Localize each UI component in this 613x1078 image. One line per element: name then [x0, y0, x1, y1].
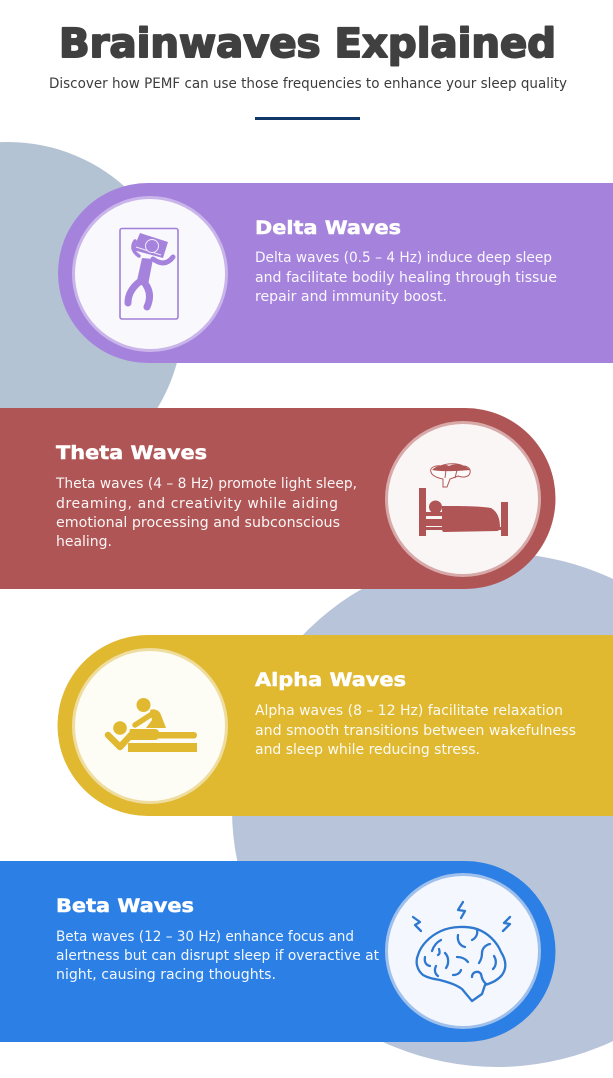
subtitle: Discover how PEMF can use those frequencies to enhance your sleep quality: [49, 76, 567, 92]
theta body: Theta waves (4 – 8 Hz) promote light sleep,: [55, 476, 357, 492]
delta bar: [58, 183, 613, 363]
theta body: healing.: [56, 534, 112, 550]
beta body: night, causing racing thoughts.: [56, 967, 276, 983]
alpha icon circle: [74, 650, 226, 802]
beta body: alertness but can disrupt sleep if overactive at: [56, 948, 380, 964]
icon: sleeping person: [120, 228, 178, 319]
alpha body: [255, 703, 576, 758]
background blob: left: [0, 142, 183, 492]
delta body: Delta waves (0.5 – 4 Hz) induce deep sleep: [255, 250, 552, 266]
panel: beta waves: [0, 861, 556, 1042]
panel: delta waves: [58, 183, 613, 363]
theta heading: Theta Waves: [56, 442, 207, 464]
panel: theta waves: [0, 408, 556, 589]
title underline: [255, 117, 360, 120]
beta bar: [0, 861, 556, 1042]
title: Brainwaves Explained: [59, 21, 556, 67]
panel: alpha waves: [58, 635, 613, 816]
alpha body: and sleep while reducing stress.: [255, 742, 480, 758]
beta heading: Beta Waves: [56, 895, 194, 917]
delta icon circle: [74, 198, 226, 350]
icon: dreaming in bed: [419, 464, 508, 536]
delta body: and facilitate bodily healing through tissue: [255, 270, 557, 286]
theta body: dreaming, and creativity while aiding: [56, 496, 338, 512]
alpha body: and smooth transitions between wakefulness: [255, 723, 576, 739]
icon: brain with bolts: [413, 902, 510, 1001]
delta body: [255, 250, 557, 305]
theta icon circle: [386, 422, 540, 576]
alpha bar: [58, 635, 613, 816]
beta body: [56, 929, 380, 983]
beta icon circle: [386, 874, 540, 1028]
theta body: emotional processing and subconscious: [56, 515, 340, 531]
background blob: right: [232, 553, 613, 1067]
alpha heading: Alpha Waves: [255, 669, 406, 691]
delta heading: Delta Waves: [255, 217, 401, 239]
theta body: [55, 476, 357, 550]
alpha body: Alpha waves (8 – 12 Hz) facilitate relaxation: [255, 703, 563, 719]
theta bar: [0, 408, 556, 589]
delta body: repair and immunity boost.: [255, 289, 447, 305]
icon: massage: [108, 698, 197, 752]
beta body: Beta waves (12 – 30 Hz) enhance focus and: [56, 929, 354, 945]
